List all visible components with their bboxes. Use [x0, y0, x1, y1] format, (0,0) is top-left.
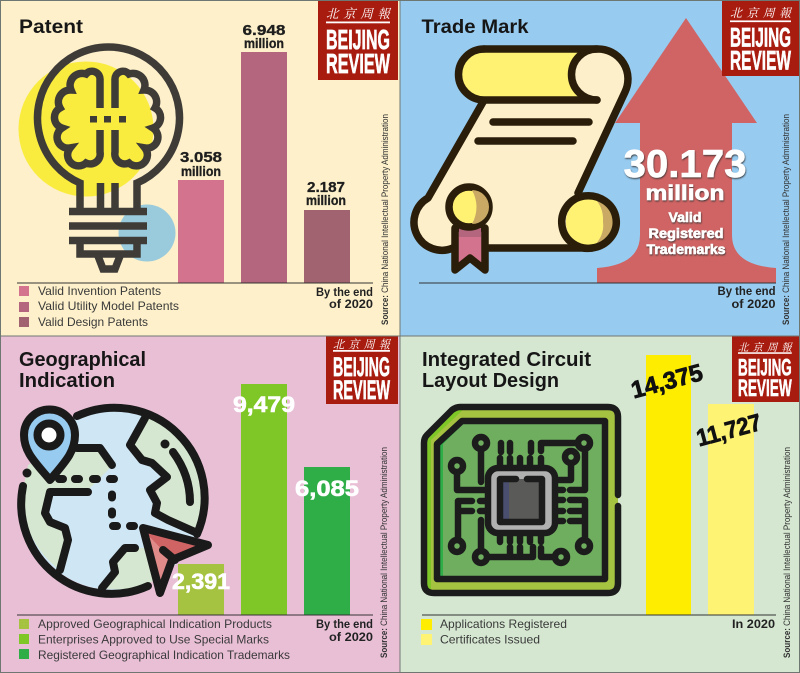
logo: Beijing Review: BEIJING [333, 353, 390, 382]
bar chart: geographical indication: 9,479 [233, 392, 295, 417]
callout: 30.173 million valid registered trademarks: million [646, 182, 724, 205]
logo: Beijing Review: 北京周報 [326, 4, 391, 22]
logo: Beijing Review: BEIJING [326, 24, 390, 55]
bar chart: layout design: 11,727 [694, 409, 764, 452]
legend: layout design [421, 617, 567, 646]
logo: Beijing Review [318, 1, 398, 80]
bar chart: patents: 2.187 [307, 180, 345, 196]
date note: By the end [316, 285, 373, 299]
legend: geographical indication: Registered Geographical Indication Trademarks [38, 648, 290, 662]
date note [316, 285, 373, 311]
title: geographical indication: Indication [19, 370, 115, 392]
bar chart: patents: 3.058 [180, 150, 222, 166]
legend: layout design: Certificates Issued [440, 632, 540, 646]
callout: 30.173 million valid registered trademarks: Valid [668, 209, 702, 225]
icon: globe with pin and arrow [21, 408, 208, 594]
callout: 30.173 million valid registered trademarks [624, 143, 746, 257]
source note: Source: China National Intellectual Property Administration [380, 114, 391, 325]
callout: 30.173 million valid registered trademarks: Registered [648, 225, 724, 241]
panel: geographical indication [0, 336, 400, 673]
date note [316, 617, 373, 644]
title: geographical indication: Geographical [19, 349, 146, 371]
panel: integrated circuit layout design [400, 336, 800, 673]
bar chart: geographical indication: 6,085 [295, 476, 359, 501]
legend: geographical indication: Approved Geographical Indication Products [38, 617, 272, 631]
panel: trade mark [400, 0, 800, 336]
source note: Source: China National Intellectual Property Administration [782, 447, 793, 658]
date note: In 2020 [732, 617, 775, 631]
logo: Beijing Review: REVIEW [333, 376, 390, 405]
big red arrow [597, 18, 776, 283]
logo: Beijing Review: 北京周報 [738, 340, 793, 355]
legend: patents: Valid Utility Model Patents [38, 299, 179, 313]
bar chart: patents: million [306, 193, 346, 208]
icon: circuit chip [424, 407, 618, 593]
logo: Beijing Review [722, 1, 799, 76]
logo: Beijing Review [732, 336, 799, 402]
logo: Beijing Review: 北京周報 [730, 4, 793, 21]
legend: patents: Valid Design Patents [38, 315, 148, 329]
axis line [419, 282, 776, 284]
legend: patents [19, 284, 179, 329]
callout: 30.173 million valid registered trademarks: 30.173 [624, 143, 746, 186]
bar chart: layout design [422, 355, 776, 615]
panel: patent [0, 0, 400, 336]
logo: Beijing Review: 北京周報 [333, 336, 391, 353]
source note: Source: China National Intellectual Property Administration [781, 114, 792, 325]
icon: scroll certificate [414, 47, 629, 270]
source note: Source: China National Intellectual Property Administration [379, 447, 390, 658]
title: patent: Patent [19, 17, 84, 38]
legend: patents: Valid Invention Patents [38, 284, 161, 298]
callout: 30.173 million valid registered trademarks: Trademarks [646, 241, 726, 257]
bar chart: geographical indication: 2,391 [172, 569, 230, 594]
bar chart: geographical indication [17, 384, 373, 615]
title: trade mark: Trade Mark [422, 17, 529, 38]
bar chart: patents: 6.948 [242, 23, 286, 39]
date note: By the end [718, 284, 776, 298]
title: geographical indication [19, 349, 146, 392]
legend: geographical indication: Enterprises Approved to Use Special Marks [38, 632, 269, 646]
date note: By the end [316, 617, 373, 631]
date note: of 2020 [732, 297, 776, 311]
bar chart: layout design: 14,375 [628, 359, 706, 404]
bar chart: patents: million [244, 36, 284, 51]
date note [718, 284, 776, 311]
bar chart: patents: million [181, 164, 221, 179]
date note: of 2020 [329, 630, 373, 644]
icon: light bulb with brain [18, 47, 180, 269]
date note: of 2020 [329, 297, 373, 311]
bar chart: patents [17, 23, 373, 283]
logo: Beijing Review: REVIEW [326, 48, 390, 79]
legend: geographical indication [19, 617, 290, 662]
legend: layout design: Applications Registered [440, 617, 567, 631]
title: integrated circuit layout design [422, 349, 591, 392]
logo: Beijing Review [326, 336, 398, 405]
title: integrated circuit layout design: Integrated Circuit [422, 349, 591, 371]
title: integrated circuit layout design: Layout Design [422, 370, 559, 392]
